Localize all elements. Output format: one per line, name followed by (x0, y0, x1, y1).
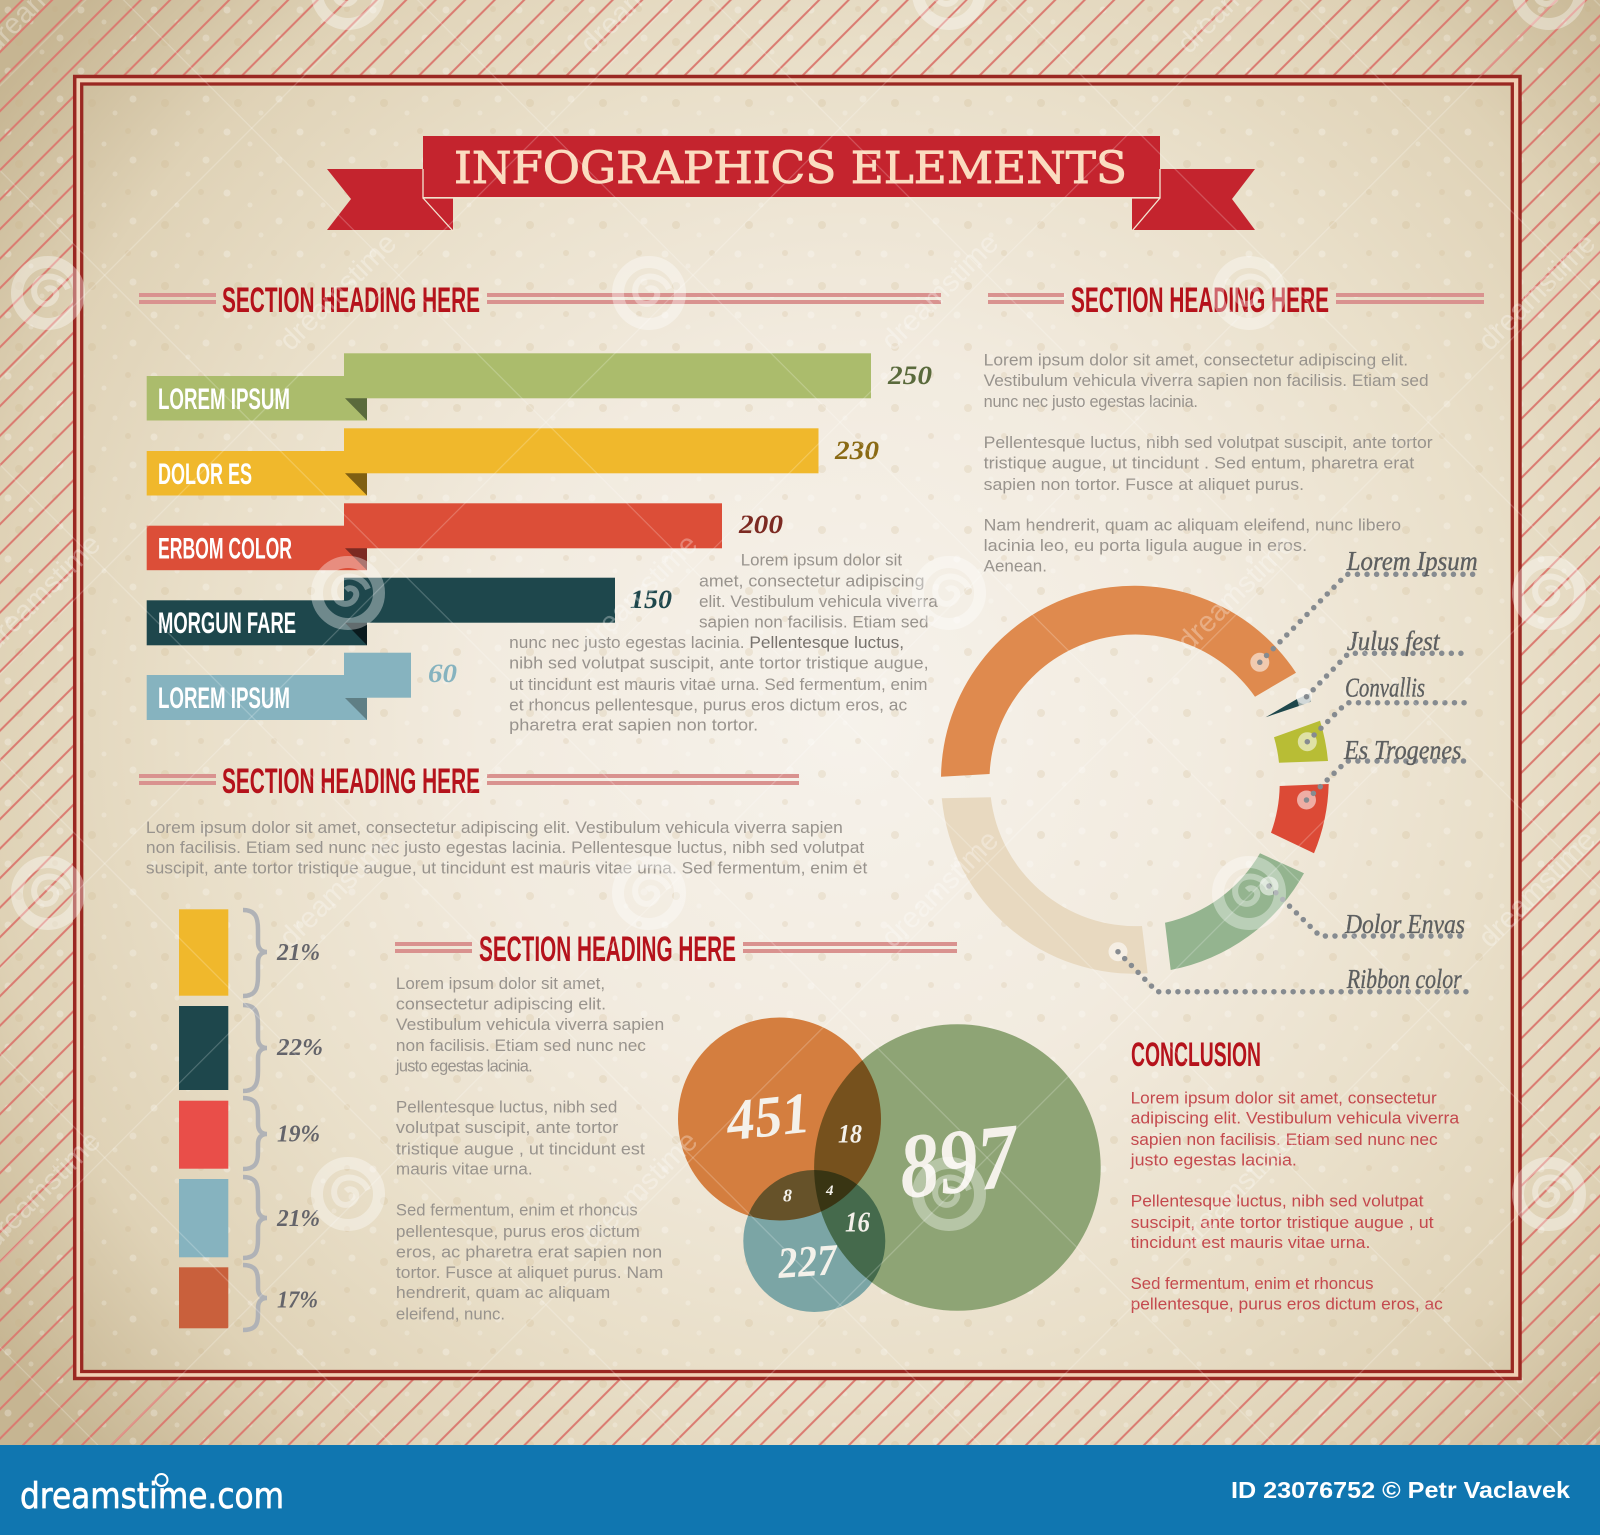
text block: beside bars: Lorem ipsum dolor sit (741, 551, 903, 569)
text block: right top: Aenean. (984, 558, 1047, 576)
leader: dolor envas: Dolor Envas (1344, 909, 1465, 939)
conclusion text: pellentesque, purus eros dictum eros, ac (1131, 1295, 1443, 1313)
watermark overlay: dreamstime (1171, 528, 1301, 658)
text block: right top: sapien non tortor. Fusce at aliquet purus. (984, 476, 1304, 494)
bar: lorem ipsum 250: LOREM IPSUM (158, 383, 290, 416)
venn diagram (678, 1018, 1101, 1312)
text block: section four: Sed fermentum, enim et rhoncus (396, 1202, 638, 1220)
color swatch column (179, 909, 323, 1330)
watermark overlay: dreamstime (574, 528, 704, 658)
text block: right top: nunc nec justo egestas lacinia. (984, 393, 1198, 411)
venn diagram: 16 (845, 1208, 870, 1239)
text block: beside bars: amet, consectetur adipiscing (699, 572, 924, 590)
panel: framed paper (75, 76, 1520, 1378)
heading: section two: SECTION HEADING HERE (1071, 281, 1329, 320)
text block: section three (146, 819, 868, 878)
leader: es trogenes: Es Trogenes (1343, 735, 1462, 765)
watermark overlay: dreamstime (875, 227, 1005, 357)
text block: right top: lacinia leo, eu porta ligula augue in eros. (984, 537, 1307, 555)
donut chart (941, 546, 1478, 994)
text block: section four (395, 975, 664, 1324)
leader: convallis (1298, 673, 1473, 751)
watermark overlay: dreamstime (875, 824, 1005, 954)
text block: section four: Lorem ipsum dolor sit amet, (396, 975, 605, 993)
text block: right top: Vestibulum vehicula viverra sapien non facilisis. Etiam sed (984, 372, 1429, 390)
conclusion text: Sed fermentum, enim et rhoncus (1131, 1275, 1373, 1293)
conclusion heading: CONCLUSION (1131, 1036, 1261, 1074)
conclusion text: Pellentesque luctus, nibh sed volutpat (1131, 1192, 1424, 1210)
watermark overlay: dreamstime (1472, 227, 1600, 357)
footer bar (0, 1445, 1600, 1535)
text block: section four: tortor. Fusce at aliquet purus. Nam (396, 1264, 663, 1282)
text block: beside bars: ut tincidunt est mauris vitae urna. Sed fermentum, enim (509, 676, 928, 694)
leader: dolor envas (1260, 876, 1469, 939)
watermark overlay: dreamstime (273, 824, 403, 954)
swatch: 21% blue (179, 1177, 320, 1258)
text block: right top: tristique augue, ut tincidunt . Sed entum, pharetra erat (984, 454, 1415, 472)
bar: dolor es 230 (147, 428, 879, 496)
swatch: 19% red (179, 1098, 320, 1169)
text block: right top: Nam hendrerit, quam ac aliquam eleifend, nunc libero (984, 517, 1401, 535)
conclusion text: sapien non facilisis. Etiam sed nunc nec (1131, 1131, 1438, 1149)
text block: section four: justo egestas lacinia. (395, 1058, 533, 1076)
conclusion text: adipiscing elit. Vestibulum vehicula viverra (1131, 1110, 1460, 1128)
text block: section four: non facilisis. Etiam sed nunc nec (396, 1037, 646, 1055)
text block: section four: volutpat suscipit, ante tortor (396, 1119, 619, 1137)
text block: beside bars: sapien non facilisis. Etiam sed (699, 614, 929, 632)
bar: dolor es 230: 230 (834, 436, 879, 465)
text block: section three: suscipit, ante tortor tristique augue, ut tincidunt est mauris vitae urna. Sed fermentum, enim et (146, 860, 868, 878)
bar: dolor es 230: DOLOR ES (158, 458, 252, 491)
text block: beside bars: et rhoncus pellentesque, purus eros dictum eros, ac (509, 696, 907, 714)
conclusion text: justo egestas lacinia. (1130, 1152, 1297, 1170)
conclusion text: tincidunt est mauris vitae urna. (1131, 1234, 1370, 1252)
bar: morgun fare 150: MORGUN FARE (158, 607, 296, 640)
swatch: 21% yellow: 21% (276, 940, 320, 966)
leader: es trogenes (1297, 735, 1473, 810)
heading: section one: SECTION HEADING HERE (222, 281, 480, 320)
text block: section four: eros, ac pharetra erat sapien non (396, 1243, 662, 1261)
conclusion text: suscipit, ante tortor tristique augue , ut (1131, 1214, 1434, 1232)
text block: section four: pellentesque, purus eros dictum (396, 1223, 640, 1241)
text block: section four: Vestibulum vehicula viverra sapien (396, 1016, 664, 1034)
heading: section three: SECTION HEADING HERE (222, 762, 480, 801)
watermark overlay: dreamstime (1171, 1125, 1301, 1255)
swatch: 19% red: 19% (277, 1122, 320, 1148)
text block: right top: Pellentesque luctus, nibh sed volutpat suscipit, ante tortor (984, 434, 1433, 452)
bar: lorem ipsum 250: 250 (887, 361, 932, 390)
swatch: 17% orange (179, 1265, 318, 1330)
text block: section four: consectetur adipiscing elit. (396, 995, 606, 1013)
text block: beside bars (509, 551, 939, 735)
text block: section four: mauris vitae urna. (396, 1161, 533, 1179)
conclusion text: Lorem ipsum dolor sit amet, consectetur (1131, 1089, 1437, 1107)
leader: julus fest (1306, 626, 1469, 697)
ribbon bar chart (147, 353, 932, 720)
bar: lorem ipsum 60: LOREM IPSUM (158, 682, 290, 715)
text block: section four: tristique augue , ut tincidunt est (396, 1140, 645, 1158)
swatch: 21% yellow (179, 909, 320, 996)
segment: needle (1266, 688, 1312, 717)
bar: morgun fare 150: 150 (630, 585, 672, 614)
venn diagram: 451 (723, 1080, 813, 1153)
bar: lorem ipsum 60 (147, 653, 457, 720)
swatch: 17% orange: 17% (277, 1288, 318, 1314)
segment: orange (941, 586, 1296, 777)
venn diagram: 18 (838, 1120, 862, 1149)
venn diagram: 8 (783, 1186, 792, 1206)
text block: section four: hendrerit, quam ac aliquam (396, 1284, 610, 1302)
segment: olive (1274, 721, 1328, 763)
text block: beside bars: elit. Vestibulum vehicula viverra (699, 593, 939, 611)
heading: section one (139, 281, 941, 320)
text block: right top: Lorem ipsum dolor sit amet, consectetur adipiscing elit. (984, 351, 1408, 369)
segment: beige (942, 797, 1148, 974)
footer credit: ID 23076752 © Petr Vaclavek (1231, 1477, 1570, 1503)
segment: red (1271, 784, 1329, 853)
text block: right top (984, 351, 1433, 576)
watermark overlay: dreamstime (273, 227, 403, 357)
leader: ribbon color (1108, 942, 1473, 994)
swatch: 22% teal: 22% (276, 1035, 323, 1061)
bar: lorem ipsum 60: 60 (428, 659, 457, 688)
watermark overlay: dreamstime (574, 1125, 704, 1255)
swatch: 21% blue: 21% (276, 1206, 320, 1232)
bar: lorem ipsum 250 (147, 353, 932, 420)
bar: erbom color 200: 200 (738, 510, 783, 539)
watermark overlay: dreamstime (1472, 824, 1600, 954)
leader: lorem ipsum: Lorem Ipsum (1346, 546, 1478, 576)
text block: section three: non facilisis. Etiam sed nunc nec justo egestas lacinia. Pellentesque luctus, nibh sed volutpat (146, 839, 865, 857)
bar: erbom color 200 (147, 503, 783, 570)
venn diagram: 897 (894, 1104, 1025, 1218)
leader: lorem ipsum (1250, 546, 1478, 672)
swatch: 22% teal (179, 1005, 323, 1091)
venn diagram: 227 (775, 1235, 840, 1288)
leader: ribbon color: Ribbon color (1346, 964, 1462, 994)
text block: section four: Pellentesque luctus, nibh sed (396, 1098, 617, 1116)
title text: INFOGRAPHICS ELEMENTS (454, 143, 1127, 194)
bar: erbom color 200: ERBOM COLOR (158, 532, 292, 566)
heading: section four: SECTION HEADING HERE (479, 930, 736, 969)
leader: julus fest: Julus fest (1347, 626, 1441, 656)
venn diagram: 4 (825, 1183, 834, 1199)
footer logo: dreamstime.com (20, 1476, 284, 1517)
heading: section three (139, 762, 799, 801)
title ribbon (327, 136, 1255, 231)
text block: section four: eleifend, nunc. (396, 1306, 505, 1324)
text block: beside bars: pharetra erat sapien non tortor. (509, 717, 758, 735)
leader: convallis: Convallis (1345, 673, 1425, 703)
text block: beside bars: nibh sed volutpat suscipit, ante tortor tristique augue, (509, 654, 929, 672)
text block: section three: Lorem ipsum dolor sit amet, consectetur adipiscing elit. Vestibulum vehicula viverra sapien (146, 819, 843, 837)
conclusion text (1130, 1089, 1460, 1313)
text block: beside bars: nunc nec justo egestas lacinia. Pellentesque luctus, (509, 634, 904, 652)
segment: green (1165, 853, 1304, 970)
bar: morgun fare 150 (147, 578, 672, 645)
